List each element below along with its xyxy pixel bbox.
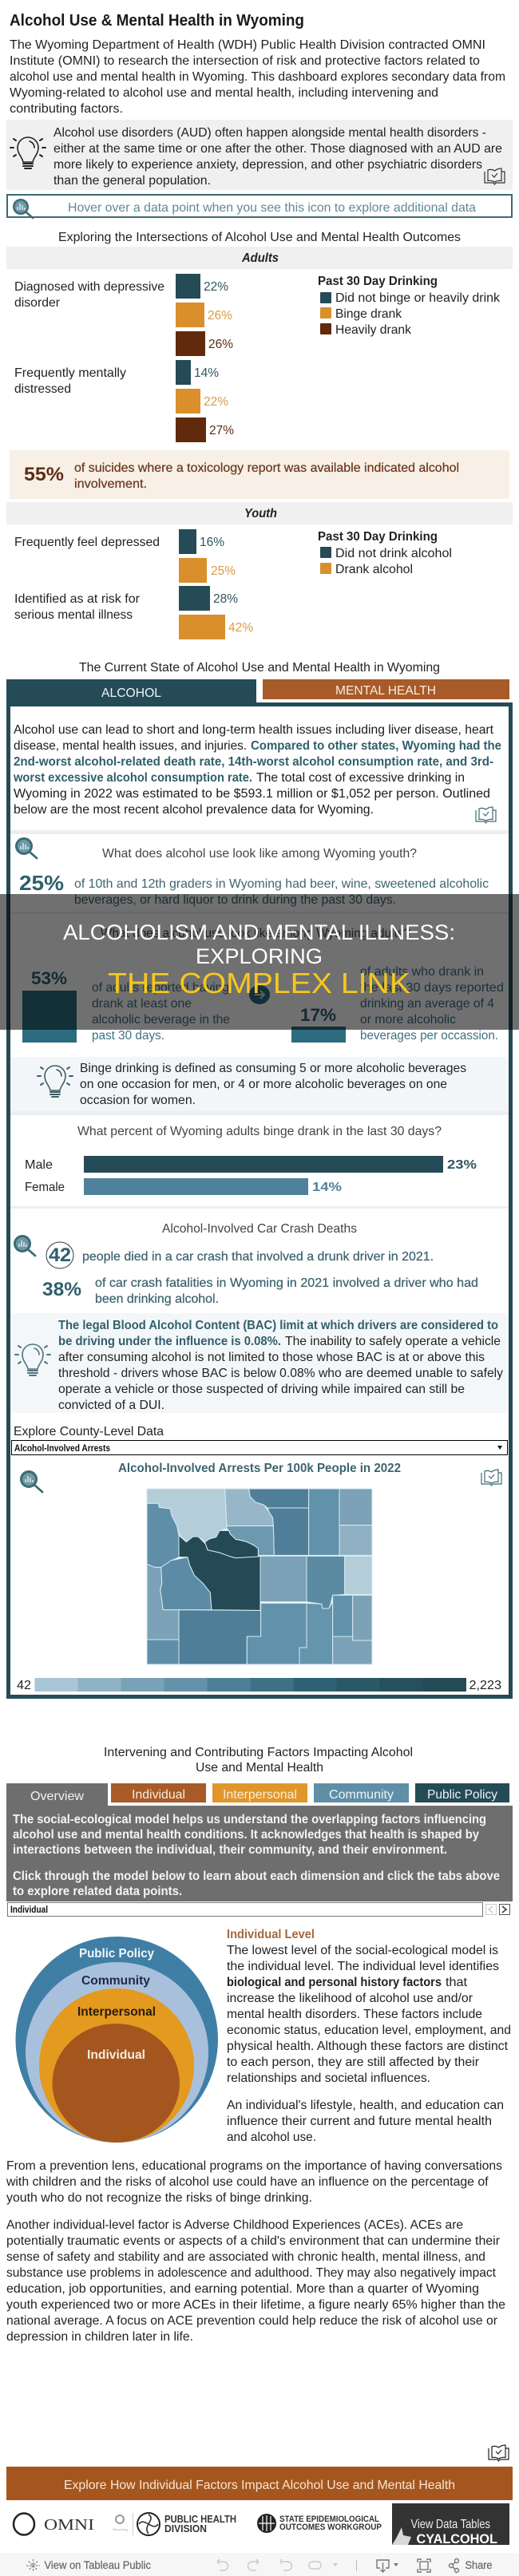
map heading: Alcohol-Involved Arrests Per 100k People in 2022 [118,1462,401,1475]
icon: book [485,168,505,184]
text block: individual level: mental health disorders. These factors include [227,2008,482,2021]
stat: 38 percent of fatalities: 38% [42,1279,81,1300]
band: adults: Adults [241,251,279,265]
callout: binge drinking definition: Binge drinking is defined as consuming 5 or more alcoholic beverages [80,1062,466,1075]
logo: Wyoming Department of Health public health division: PUBLIC HEALTH [164,2513,236,2525]
heading: youth alcohol use: What does alcohol use look like among Wyoming youth? [102,847,417,861]
bar chart: youth: 42% [228,621,253,635]
bar chart: adults: 14% [194,366,219,380]
stat: 17 percent of adults: of adults who drank in [360,965,484,979]
intro text block: alcohol use and mental health in Wyoming. This dashboard explores secondary data from [10,70,505,84]
legend: youth past 30 day drinking: Did not drink alcohol [335,547,452,560]
icon: light bulb [10,137,46,168]
text block: alcohol overview: The total cost of excessive drinking in [256,771,465,785]
text block: individual level: Individual Level [227,1928,315,1941]
title: Alcohol Use & Mental Health in Wyoming [10,12,304,30]
stat: 25 percent of 10th and 12th graders: 25% [19,871,64,895]
bar chart: binge drinking by sex: Female [25,1181,65,1194]
callout: BAC limit [10,1313,509,1413]
text block: individual level: economic status, education level, employment, and [227,2024,511,2037]
toolbar: tableau public: View on Tableau Public [45,2558,151,2571]
heading: exploring the intersections: Exploring the Intersections of Alcohol Use and Mental Health Outcomes [58,231,461,244]
text block: individual level: increase the likelihood of alcohol use and/or [227,1992,473,2005]
text block: adverse childhood experiences: Another individual-level factor is Adverse Childhood Experiences (ACEs). ACEs are [6,2218,463,2232]
legend: adults past 30 day drinking: Heavily drank [335,323,412,337]
icon: magnifier [14,1236,35,1256]
stat: 42 people died [46,1242,434,1268]
heading: binge by sex: What percent of Wyoming adults binge drank in the last 30 days? [77,1125,442,1138]
icon: book [489,2445,509,2461]
stat: 53 percent of adults [22,968,230,1043]
social-ecological model diagram [16,1937,218,2143]
toolbar icons: undo redo revert refresh [217,2559,321,2570]
legend: adults past 30 day drinking: Past 30 Day Drinking [318,275,438,288]
bar chart: adults: 27% [209,424,234,437]
button: explore individual factors: Explore How Individual Factors Impact Alcohol Use and Mental Health [64,2479,455,2492]
stat: 25 percent of 10th and 12th graders: beverages, or hard liquor to drink during the past 30 days. [74,893,396,907]
bar chart: adults: 22% [204,280,228,294]
legend: adults past 30 day drinking: Binge drank [335,307,402,321]
intro text block: Wyoming-related to alcohol use and mental health, including intervening and [10,86,438,100]
logo: state epidemiological outcomes workgroup [257,2514,382,2533]
bar chart: adults: Frequently mentally [14,366,126,380]
stat: 38 percent of fatalities: of car crash fatalities in Wyoming in 2021 involved a driver who had [95,1276,478,1290]
hover instruction box [7,195,512,218]
panel: overview tab [6,1783,513,1901]
band: youth: Youth [244,507,277,520]
stat: 53 percent of adults: 53% [31,968,67,988]
text block: adverse childhood experiences: potentially traumatic events or aspects of a child's environment that can undermine their [6,2234,501,2248]
text block: adverse childhood experiences: substance use problems in adolescence and adulthood. They may also negatively impact [6,2266,497,2280]
overlay banner: article title: ALCOHOLISM AND MENTAL ILLNESS: [63,920,455,944]
text block: individual level: that [446,1976,468,1989]
tab: individual: Individual [132,1788,185,1802]
text block: individual level: biological and personal history factors [227,1976,442,1989]
heading: intervening factors [104,1746,413,1775]
overlay banner: article title: THE COMPLEX LINK [108,967,410,999]
text block: individual level: and alcohol use. [227,2131,316,2144]
stat: 38 percent of fatalities [42,1276,478,1306]
stat: 38 percent of fatalities: been drinking alcohol. [95,1292,219,1306]
panel: overview tab: Overview [30,1790,84,1803]
logo: OMNI [14,2513,94,2535]
map colour legend: 2,223 [469,1679,501,1692]
stat: 53 percent of adults: of adults reported having [92,981,229,995]
logo: Wyoming Department of Health public health division: DIVISION [164,2523,207,2534]
text block: alcohol overview: Compared to other states, Wyoming had the [251,739,501,753]
callout: BAC limit: be driving under the influence is 0.08%. [58,1335,281,1348]
icon: magnifier [16,838,37,858]
choropleth map: Wyoming counties [147,1489,372,1664]
text block: alcohol overview: worst excessive alcohol consumption rate. [13,771,252,785]
text block: adverse childhood experiences: depression in children later in life. [6,2330,193,2344]
tab: public policy [415,1783,509,1802]
band: adults [6,247,513,269]
logo: Wyoming Department of Health public health division: Wyoming [113,2527,128,2531]
dropdown: alcohol-involved arrests [11,1440,508,1454]
stat: 17 percent of adults: the last 30 days reported [360,981,504,995]
logo: state epidemiological outcomes workgroup: STATE EPIDEMIOLOGICAL [279,2515,379,2524]
stat: 53 percent of adults: drank at least one [92,997,192,1011]
callout: 55 percent of suicides: involvement. [74,477,147,491]
intro text block [10,38,505,116]
text block: individual level: influence their current and future mental health [227,2115,492,2128]
callout: BAC limit: operate a vehicle or those suspected of driving while impaired can still be [58,1383,465,1396]
overlay banner: article title [0,894,519,1030]
stat: 17 percent of adults [291,965,504,1043]
callout: 55 percent of suicides: 55% [24,464,64,485]
callout: BAC limit: convicted of a DUI. [58,1399,164,1412]
arrow: next stat [249,985,270,1004]
text block: alcohol overview: 2nd-worst alcohol-related death rate, 14th-worst alcohol consumption rate, and 3rd- [14,755,493,769]
tab: community [314,1783,409,1802]
text block: individual level: The lowest level of the social-ecological model is [227,1944,498,1957]
heading: intervening factors: Intervening and Contributing Factors Impacting Alcohol [104,1746,413,1759]
callout: alcohol use disorders: more likely to experience anxiety, depression, and other psychiatric disorders [53,158,482,172]
logo: OMNI: OMNI [44,2516,94,2534]
panel: overview tab: alcohol use and mental health conditions. It acknowledges that health is shaped by [13,1828,479,1842]
heading: explore county-level data: Explore County-Level Data [14,1425,164,1438]
logo: Wyoming Department of Health public health division [113,2513,236,2535]
bar chart: adults: distressed [14,382,71,396]
text block: prevention lens [6,2159,502,2205]
text block: adverse childhood experiences [6,2218,505,2344]
icon: book [476,807,496,823]
bar chart: adults [14,274,234,442]
tab: public policy: Public Policy [427,1788,497,1802]
intro text block: Institute (OMNI) to research the intersection of risk and protective factors related to [10,54,480,68]
button: explore individual factors [6,2467,513,2500]
panel: overview tab: interactions between the individual, their community, and their environment. [13,1843,447,1857]
icon: magnifier [13,200,33,218]
text block: individual level: relationships and societal influences. [227,2071,430,2085]
text block: individual level: the individual level. The individual level identifies [227,1960,499,1973]
text block: prevention lens: with children and the risks of alcohol use could have an influence on the percentage of [6,2175,489,2189]
callout: BAC limit: The inability to safely operate a vehicle [285,1335,501,1348]
icon: tableau logo [26,2559,40,2572]
heading: current state: The Current State of Alcohol Use and Mental Health in Wyoming [79,661,440,675]
tab: mental health [263,679,509,699]
callout: binge drinking definition: on one occasion for men, or 4 or more alcoholic beverages on one [80,1078,447,1091]
callout: alcohol use disorders: than the general population. [53,174,211,188]
bar chart: youth: Identified as at risk for [14,592,141,606]
icon: light bulb [15,1344,50,1375]
intro text block: The Wyoming Department of Health (WDH) Public Health Division contracted OMNI [10,38,485,52]
icon: magnifier [21,1470,42,1492]
bar chart: youth: 25% [211,564,236,578]
legend: youth past 30 day drinking: Past 30 Day Drinking [318,530,438,544]
social-ecological model diagram: Community [81,1974,150,1988]
panel: alcohol tab [6,679,513,1699]
bar chart: binge drinking by sex: 23% [447,1158,477,1172]
bar chart: youth: serious mental illness [14,608,133,622]
text block: adverse childhood experiences: national average. A focus on ACE prevention could help reduce the risk of alcohol use or [6,2314,498,2328]
legend: youth past 30 day drinking [318,530,452,576]
bar chart: binge drinking by sex [25,1156,477,1195]
button: view data tables: View Data Tables [410,2518,490,2531]
map colour legend [17,1678,501,1692]
stat: 25 percent of 10th and 12th graders: of 10th and 12th graders in Wyoming had beer, wine, sweetened alcoholic [74,877,489,891]
map colour legend: 42 [17,1679,31,1692]
legend: youth past 30 day drinking: Drank alcohol [335,563,413,576]
stat: 17 percent of adults: beverages per occassion. [360,1029,498,1043]
stat: 17 percent of adults: drinking an average of 4 [360,997,494,1011]
bar chart: youth: 16% [200,536,224,549]
toolbar: tableau public [0,2553,519,2576]
legend: adults past 30 day drinking: Did not binge or heavily drink [335,291,501,305]
tab: interpersonal [212,1783,307,1802]
text block: alcohol overview [13,723,501,817]
button: view data tables [392,2503,509,2546]
text block: adverse childhood experiences: youth experienced two or more ACEs in their lifetime, a figure nearly 65% higher than the [6,2298,505,2312]
text block: alcohol overview: disease, mental health issues, and injuries. [14,739,247,753]
tab: mental health: MENTAL HEALTH [335,684,436,698]
stat: 42 people died: 42 [49,1244,71,1266]
stat: 53 percent of adults: alcoholic beverage in the [92,1013,230,1027]
bar chart: youth: Frequently feel depressed [14,536,160,549]
callout: BAC limit: after consuming alcohol is not limited to those whose BAC is at or above this [58,1351,485,1364]
text block: adverse childhood experiences: education, job opportunities, and earning potential. More than a quarter of Wyoming [6,2282,479,2296]
bar chart: adults: 26% [208,309,232,322]
tab: individual [111,1783,206,1802]
text block: prevention lens: From a prevention lens, educational programs on the importance of having conversations [6,2159,502,2173]
bar chart: adults: disorder [14,296,61,310]
heading: car crash deaths: Alcohol-Involved Car Crash Deaths [162,1222,357,1236]
social-ecological model diagram: Interpersonal [77,2005,156,2019]
callout: 55 percent of suicides: of suicides where a toxicology report was available indicated alcohol [74,461,459,475]
stat: 17 percent of adults: 17% [300,1005,336,1025]
stat: 53 percent of adults: past 30 days. [92,1029,164,1043]
callout: alcohol use disorders: Alcohol use disorders (AUD) often happen alongside mental health disorders - [53,126,486,140]
stat: 17 percent of adults: or more alcoholic [360,1013,456,1027]
text block: individual level [227,1928,511,2144]
callout: alcohol use disorders [6,120,513,190]
social-ecological model diagram: Public Policy [79,1947,154,1961]
callout: binge drinking definition: occasion for women. [80,1094,196,1107]
intro text block: contributing factors. [10,102,123,116]
logo: state epidemiological outcomes workgroup: OUTCOMES WORKGROUP [279,2523,382,2532]
dropdown: alcohol-involved arrests: Alcohol-Involved Arrests [14,1442,110,1454]
heading: intervening factors: Use and Mental Health [196,1761,323,1775]
callout: binge drinking definition [10,1057,509,1111]
legend: adults past 30 day drinking [318,275,501,337]
dropdown: individual: Individual [10,1904,48,1915]
bar chart: youth: 28% [213,592,238,606]
icon: book [481,1470,501,1486]
text block: alcohol overview: Wyoming in 2022 was estimated to be $593.1 million or $1,052 per person. Outlined [14,787,490,801]
panel: overview tab: to explore related data points. [13,1885,182,1898]
stat: 42 people died: people died in a car crash that involved a drunk driver in 2021. [82,1250,434,1264]
text block: alcohol overview: Alcohol use can lead to short and long-term health issues including liver disease, heart [14,723,494,737]
bar chart: adults: Diagnosed with depressive [14,280,164,294]
dropdown: individual [8,1903,509,1916]
button: view data tables: CYALCOHOL [417,2531,497,2546]
callout: 55 percent of suicides [10,450,509,499]
bar chart: youth [14,529,253,639]
toolbar icons: download fullscreen share [377,2559,458,2572]
text block: individual level: physical health. Although these factors are distinct [227,2040,509,2053]
text block: alcohol overview: below are the most recent alcohol prevalence data for Wyoming. [14,803,374,817]
bar chart: binge drinking by sex: 14% [312,1181,342,1194]
overlay banner: article title: EXPLORING [196,944,323,968]
hover instruction box: Hover over a data point when you see this icon to explore additional data [68,201,476,215]
text block: individual level: An individual's lifestyle, health, and education can [227,2099,504,2112]
tab label: alcohol: ALCOHOL [101,687,161,700]
text block: individual level: to each person, they are still affected by their [227,2056,480,2069]
callout: alcohol use disorders: either at the same time or one after the other. Those diagnosed with an AUD are [53,142,502,156]
bar chart: adults: 26% [208,338,233,351]
bar chart: binge drinking by sex: Male [25,1158,53,1172]
text block: prevention lens: youth who do not recognize the risks of binge drinking. [6,2191,312,2205]
heading: adult alcohol use: What does alcohol use look like among Wyoming adults? [101,927,410,940]
toolbar: tableau public: Share [465,2558,493,2571]
tab: community: Community [329,1788,394,1802]
panel: overview tab: The social-ecological model helps us understand the overlapping factors influencing [13,1813,486,1826]
text block: adverse childhood experiences: sense of safety and stability and are associated with chronic health, mental illness, and [6,2250,485,2264]
social-ecological model diagram: Individual [87,2048,145,2062]
stat: 25 percent of 10th and 12th graders [19,871,489,907]
band: youth [6,502,513,524]
callout: BAC limit: threshold - drivers whose BAC is below 0.08% who are deemed unable to safely [58,1367,503,1380]
bar chart: adults: 22% [204,395,228,409]
icon: light bulb [38,1066,73,1097]
tab: interpersonal: Interpersonal [223,1788,297,1802]
